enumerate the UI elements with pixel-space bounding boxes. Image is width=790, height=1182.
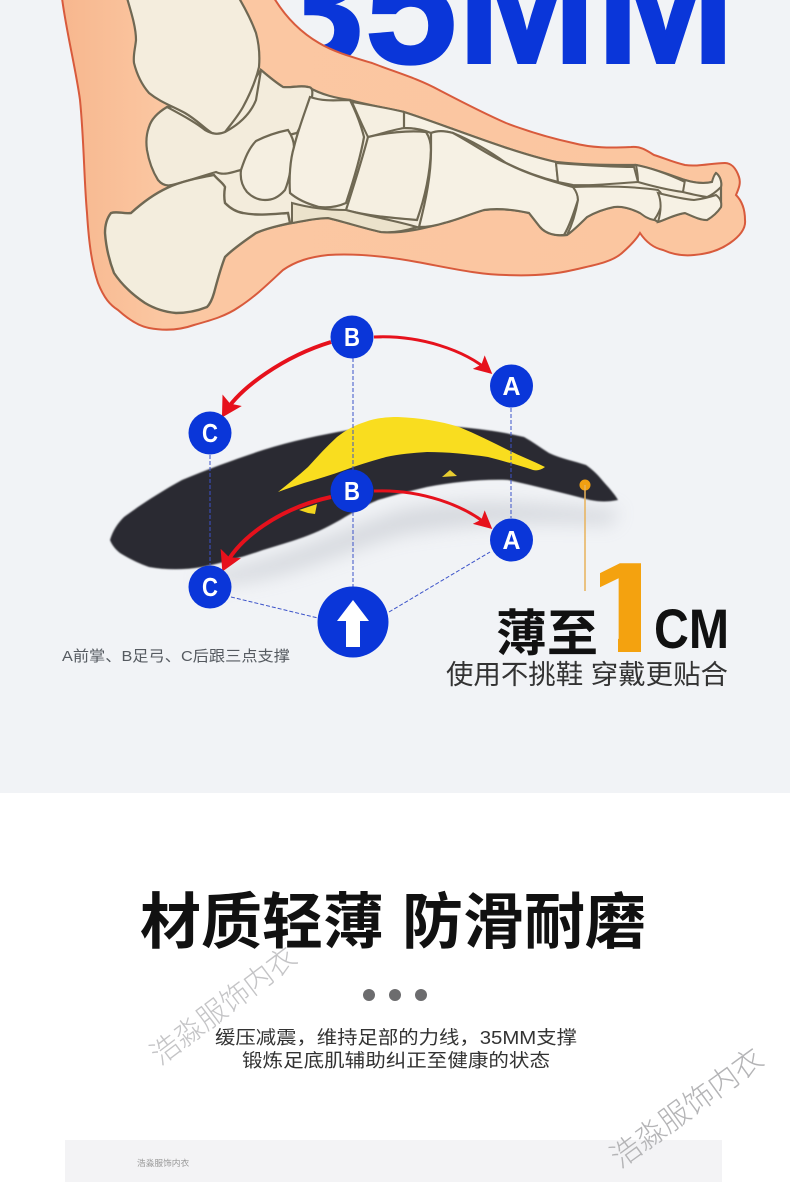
talus bone — [146, 70, 312, 185]
yellow arch pad — [278, 417, 545, 492]
marker: B upper: B — [344, 322, 360, 352]
insole body — [110, 426, 618, 569]
red arrows: upper — [224, 337, 490, 414]
marker: C lower — [188, 566, 232, 608]
bone silhouette underlay — [147, 70, 721, 235]
marker: B lower — [330, 470, 374, 512]
decorative dots — [363, 989, 427, 1001]
phalanx bones — [556, 163, 638, 185]
text block: description: 缓压减震，维持足部的力线，35MM支撑 — [215, 1027, 577, 1048]
dashed support lines — [210, 358, 511, 618]
cuneiform bones — [290, 97, 364, 207]
callout subtitle: 使用不挑鞋 穿戴更贴合 — [446, 660, 728, 690]
callout: thin to 1CM: 1 — [580, 536, 673, 680]
marker: A upper — [490, 364, 533, 408]
marker: A lower — [490, 518, 533, 562]
metatarsal bones — [404, 112, 558, 182]
red arrows: lower — [224, 491, 490, 568]
cuboid bone — [292, 203, 417, 232]
navicular bone — [241, 130, 294, 200]
callout: thin to 1CM: 薄至 — [496, 606, 598, 662]
heading: anti-slip: 防滑耐磨 — [402, 888, 646, 956]
callout: thin to 1CM — [498, 563, 726, 656]
text block: description: 锻炼足底肌辅助纠正至健康的状态 — [242, 1050, 550, 1071]
icon: upward arrow in circle — [318, 586, 388, 658]
calcaneus bone — [105, 175, 290, 313]
panel: bottom grey strip — [65, 1140, 722, 1182]
caption: three point support: A前掌、B足弓、C后跟三点支撑 — [62, 648, 290, 665]
foot skin outline — [62, 0, 745, 330]
callout: thin to 1CM: CM — [654, 597, 729, 660]
panel: white lower section — [0, 793, 790, 1182]
panel: upper grey background — [0, 0, 790, 793]
marker: C upper: C — [202, 418, 218, 448]
marker: A upper: A — [502, 371, 521, 401]
insole shadow — [200, 502, 620, 585]
watermark: left: 浩淼服饰内衣 — [144, 941, 303, 1072]
text block: description — [215, 1027, 577, 1071]
yellow vents — [442, 470, 457, 477]
callout: thickness leader — [580, 480, 590, 591]
tibia bone — [127, 0, 259, 134]
watermark: strip label: 浩淼服饰内衣 — [137, 1157, 189, 1168]
illustration: insole — [110, 417, 620, 585]
illustration: foot skeleton — [62, 0, 745, 330]
marker: B upper — [330, 316, 374, 358]
heading: material: 材质轻薄 — [140, 888, 384, 956]
marker: C lower: C — [202, 572, 218, 602]
marker: C upper — [188, 412, 232, 454]
marker: A lower: A — [502, 525, 521, 555]
marker: B lower: B — [344, 476, 360, 506]
watermark: right: 浩淼服饰内衣 — [605, 1042, 770, 1175]
